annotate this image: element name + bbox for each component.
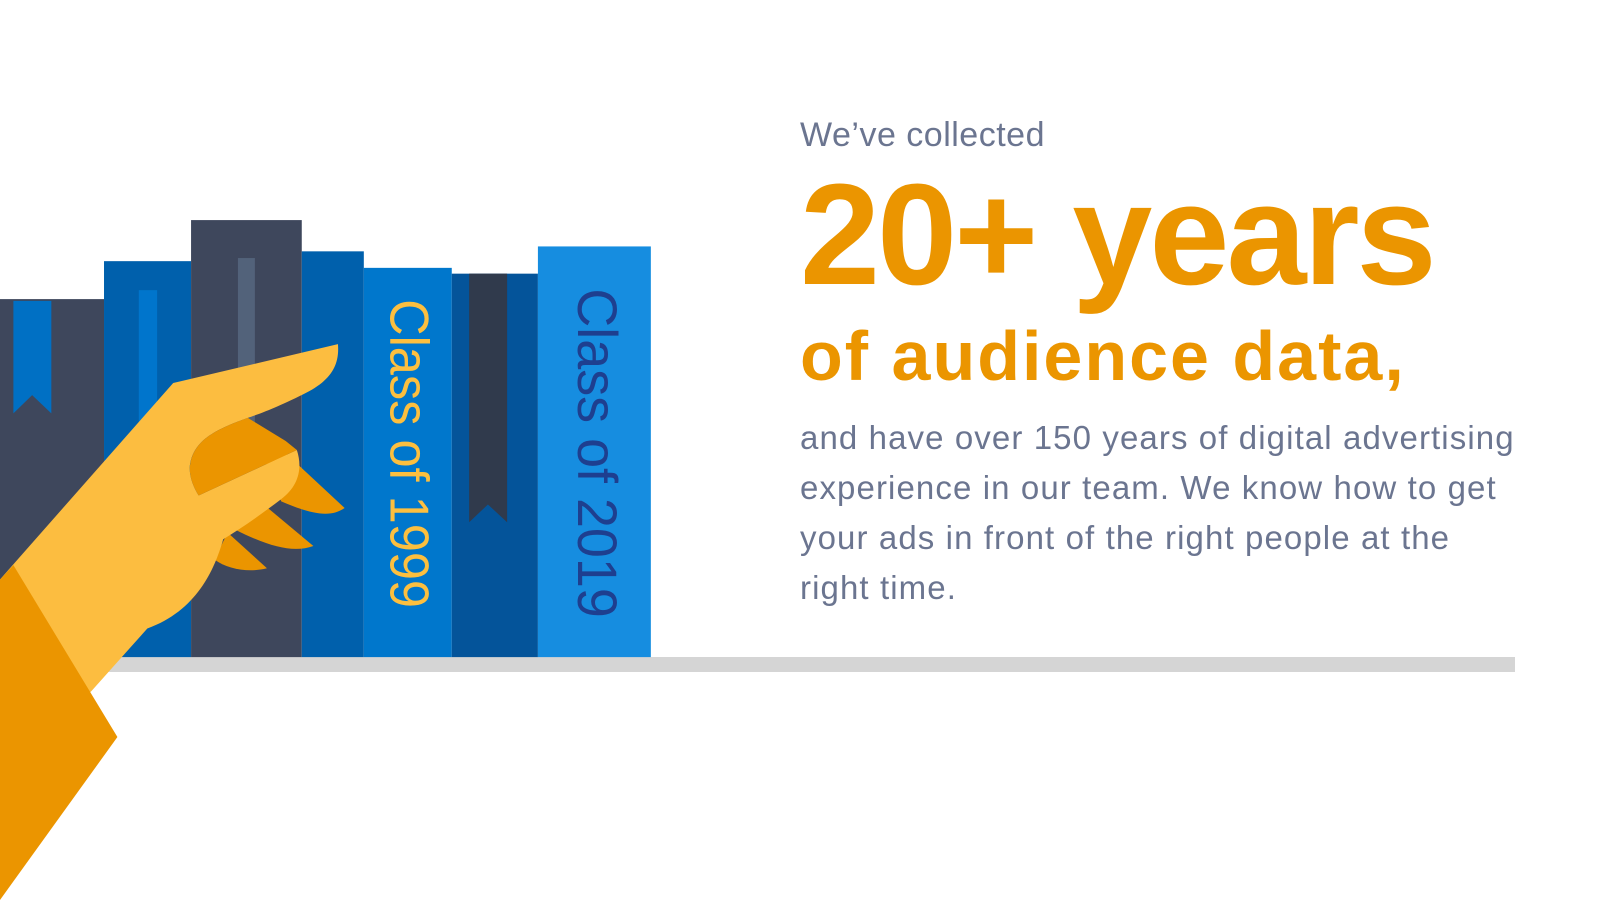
body text (800, 419, 1515, 606)
body text: and have over 150 years of digital advertising (800, 419, 1515, 456)
shelf (90, 657, 1515, 672)
intro text: We’ve collected (800, 116, 1045, 154)
hand (0, 344, 345, 900)
books (0, 220, 651, 657)
body text: right time. (800, 569, 957, 606)
body text: your ads in front of the right people at the (800, 519, 1450, 556)
body text: experience in our team. We know how to get (800, 469, 1497, 506)
spine text: Class of 2019: Class of 2019 (566, 288, 628, 618)
spine text: Class of 1999: Class of 1999 (379, 299, 440, 608)
subheadline: of audience data, (800, 317, 1406, 395)
headline: 20+ years: 20+ years (800, 154, 1434, 315)
